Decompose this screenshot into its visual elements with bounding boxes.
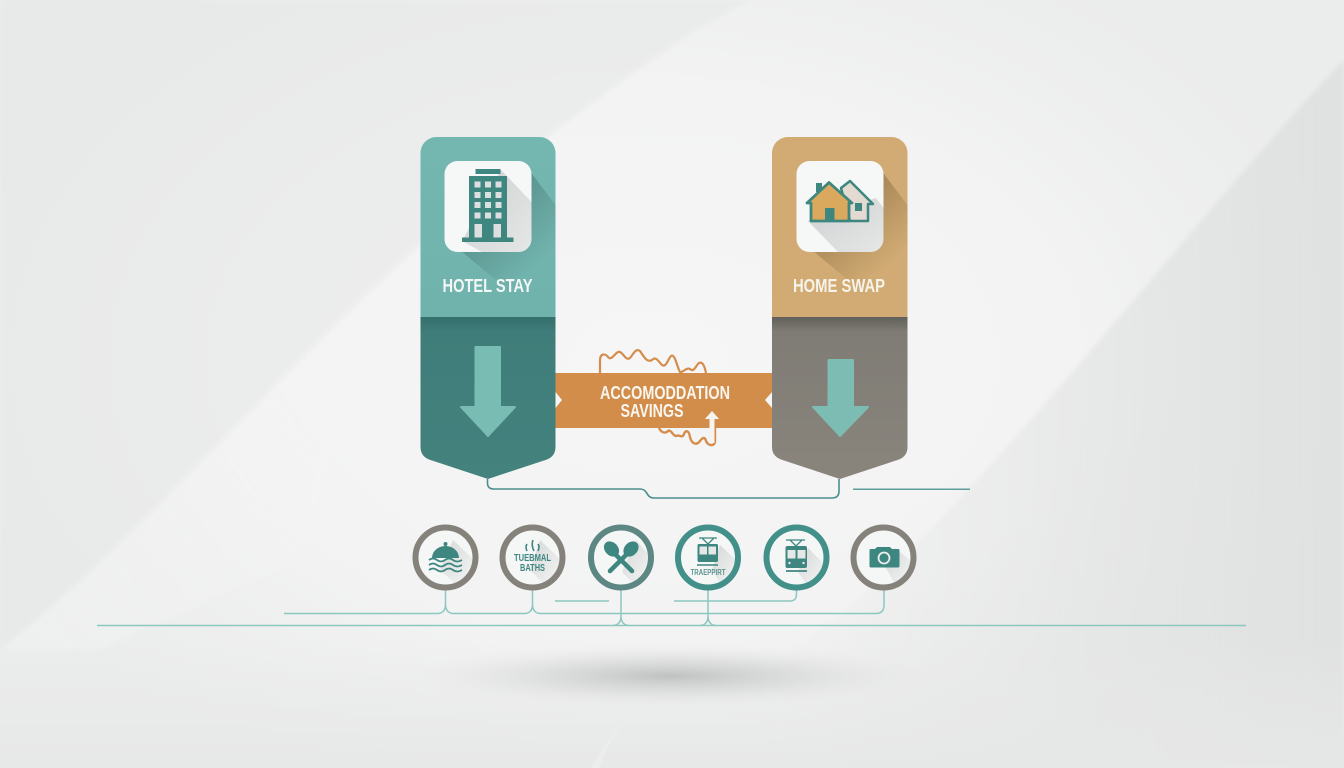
connector: squiggle below band <box>659 428 715 445</box>
label: transport: TRAEPPIRT <box>690 568 726 577</box>
label: savings: SAVINGS <box>620 401 684 421</box>
icon circle: transport <box>678 528 738 588</box>
panel: hotel stay <box>420 137 556 479</box>
line: short right link <box>853 488 970 490</box>
panel top: hotel stay header <box>420 137 556 317</box>
icon circle: food <box>591 528 651 588</box>
label: home swap: HOME SWAP <box>793 276 885 296</box>
icon: houses <box>796 161 884 252</box>
panel bottom: hotel stay arrow block <box>420 317 556 479</box>
label: hotel stay: HOTEL STAY <box>442 276 532 296</box>
connectors: timeline lines <box>97 590 1246 626</box>
panel bottom: home swap arrow block <box>772 317 908 479</box>
label: thermal baths: TUEBMAL <box>514 553 551 564</box>
icon circle: camera <box>854 528 914 588</box>
label: accommodation: ACCOMODDATION <box>600 383 730 403</box>
icon: down arrow teal <box>461 347 515 436</box>
icon circle: thermal baths <box>502 528 562 588</box>
band: accommodation savings <box>556 373 772 428</box>
icon circle: train <box>766 528 826 588</box>
connector: panels link <box>488 479 839 498</box>
connector: squiggle above band <box>600 350 706 373</box>
icon: down arrow grey <box>813 360 868 436</box>
icon: small up arrow <box>705 411 719 443</box>
panel top: home swap header <box>772 137 908 317</box>
icon: hotel building <box>444 161 532 252</box>
panel: home swap <box>772 137 908 479</box>
icon circle: thermal baths: BATHS <box>520 563 545 574</box>
icon circle: thermal resort <box>416 528 476 588</box>
